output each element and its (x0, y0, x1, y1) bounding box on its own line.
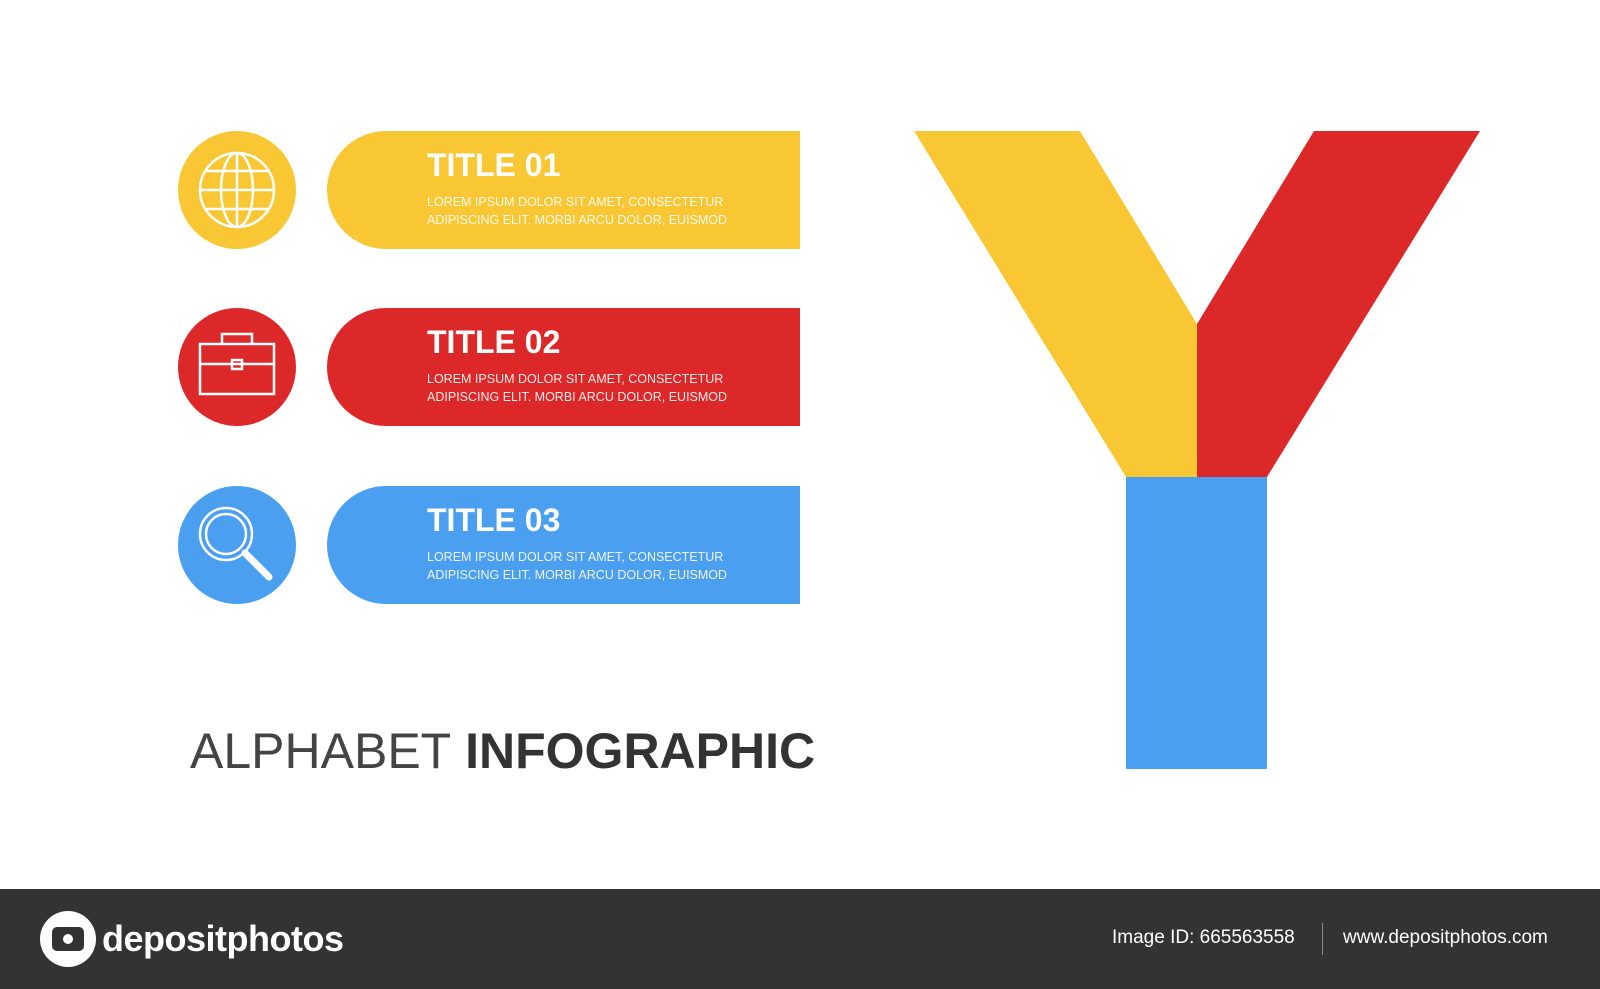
panel: title 01: LOREM IPSUM DOLOR SIT AMET, CONSECTETUR (427, 195, 723, 209)
footer bar (0, 889, 1600, 989)
panel: title 02: ADIPISCING ELIT. MORBI ARCU DOLOR, EUISMOD (427, 390, 727, 404)
panel: title 01 (327, 131, 800, 249)
footer url: www.depositphotos.com (1343, 927, 1548, 948)
panel: title 03 (327, 486, 800, 604)
icon: globe circle (178, 131, 296, 249)
panel: title 02 (327, 308, 800, 426)
panel: title 02: LOREM IPSUM DOLOR SIT AMET, CONSECTETUR (427, 372, 723, 386)
panel: title 03: TITLE 03 (427, 502, 560, 538)
panel: title 01: ADIPISCING ELIT. MORBI ARCU DOLOR, EUISMOD (427, 213, 727, 227)
heading: alphabet infographic: ALPHABET INFOGRAPHIC (190, 723, 815, 779)
panel: title 03: ADIPISCING ELIT. MORBI ARCU DOLOR, EUISMOD (427, 568, 727, 582)
icon: magnifier circle (178, 486, 296, 604)
footer logo: depositphotos (102, 918, 343, 959)
icon: briefcase circle (178, 308, 296, 426)
footer image id: Image ID: 665563558 (1112, 927, 1295, 948)
panel: title 02: TITLE 02 (427, 324, 560, 360)
footer logo (40, 911, 343, 967)
panel: title 03: LOREM IPSUM DOLOR SIT AMET, CONSECTETUR (427, 550, 723, 564)
panel: title 01: TITLE 01 (427, 147, 560, 183)
